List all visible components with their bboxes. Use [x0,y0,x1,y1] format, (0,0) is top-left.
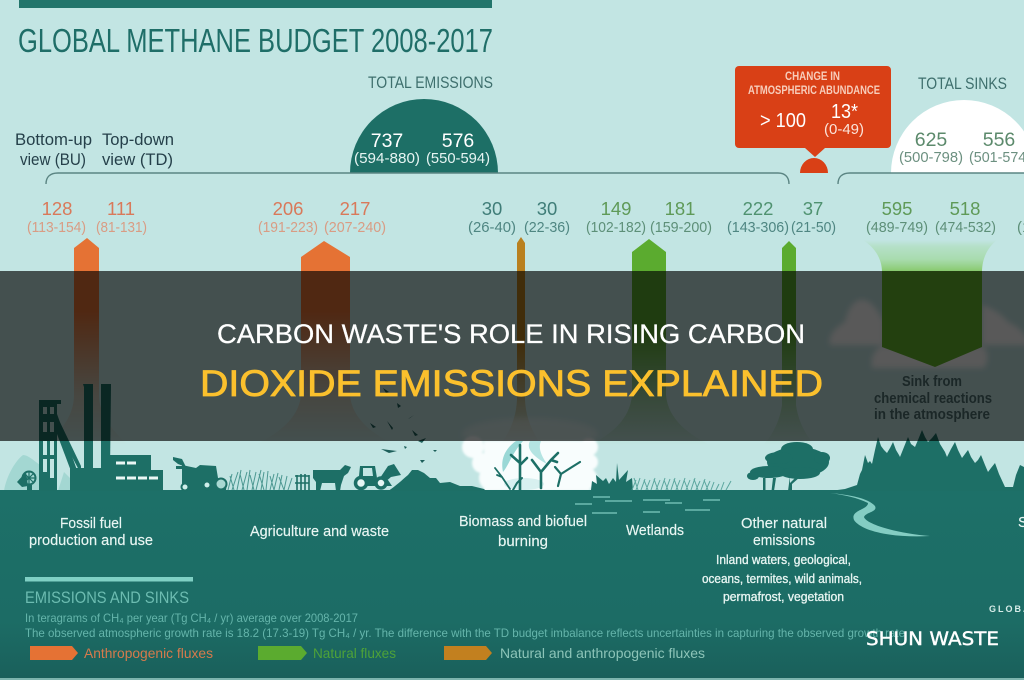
label: biomass and biofuel burning [459,514,587,550]
view labels: Top-down [102,131,174,149]
values: wetlands [586,198,712,236]
callout: change in atmospheric abundance: CHANGE IN [785,71,840,83]
legend heading: EMISSIONS AND SINKS [25,589,189,607]
legend: natural fluxes: Natural fluxes [313,645,396,661]
values: agriculture and waste: 217 [340,198,370,219]
dome: total emissions [350,99,498,173]
values: biomass burning: (26-40) [468,219,516,236]
values: wetlands: (102-182) [586,219,646,236]
dome: total sinks: (500-798) [899,149,963,166]
callout: change in atmospheric abundance: ATMOSPHERIC ABUNDANCE [748,85,880,97]
values: agriculture and waste [258,198,386,236]
label: other natural emissions: Other natural [741,516,827,532]
label: fossil fuel: Fossil fuel [60,516,122,532]
callout: change in atmospheric abundance: (0-49) [824,122,864,138]
icon: crop field [228,470,292,490]
icon: coal mine and factory [17,384,163,491]
hills behind the mine [4,455,78,491]
icon: tree [747,442,830,491]
label: agriculture and waste: Agriculture and waste [250,524,389,540]
values: other natural emissions: 37 [803,198,823,219]
bottom edge [0,678,1024,680]
title: GLOBAL METHANE BUDGET 2008-2017 [18,22,493,59]
arrow: other natural flux [763,241,815,445]
values: fossil fuel: 128 [42,198,72,219]
values: wetlands: (159-200) [650,219,712,236]
scene: smoke from burning [462,418,598,491]
legend: natural and anthropogenic fluxes: Natural and anthropogenic fluxes [500,645,705,661]
label: sink from chemical reactions: in the atmosphere [874,407,990,423]
dome: total emissions: (594-880) [354,150,420,167]
values: biomass burning [468,198,570,236]
legend description: The observed atmospheric growth rate is 18.2 (17.3-19) Tg CH₄ / yr. The difference with the TD budget imbalance reflects uncertainties in capturing the observed growth rate [25,626,905,640]
values: biomass burning: (22-36) [524,219,570,236]
dome: total emissions: (550-594) [426,150,490,167]
icon: waste mound [388,470,486,491]
label: biomass and biofuel burning: burning [498,534,548,550]
values: other natural emissions: (21-50) [791,219,836,236]
ground [0,490,1024,678]
icon: birds [370,388,437,463]
dome: total emissions: 576 [442,130,474,152]
label: other natural sources detail: Inland waters, geological, [716,553,851,567]
dome: total sinks [891,100,1024,173]
values: biomass burning: 30 [537,198,557,219]
legend rule [25,577,193,582]
dome: total sinks: 625 [915,129,947,151]
icon: combine harvester [173,457,227,490]
values: biomass burning: 30 [482,198,502,219]
callout: change in atmospheric abundance: > 100 [760,110,806,132]
label: other natural emissions: emissions [753,533,815,549]
values: fossil fuel [27,198,147,236]
label: fossil fuel [29,516,153,549]
values: fossil fuel: 111 [107,198,135,219]
callout: change in atmospheric abundance: 13* [831,101,858,123]
values: wetlands: 181 [665,198,695,219]
legend description: In teragrams of CH₄ per year (Tg CH₄ / yr) average over 2008-2017 [25,611,358,625]
brackets [46,173,1024,184]
values: chemical sink: (489-749) [866,219,928,236]
view labels: view (TD) [102,151,173,169]
icon: tractor [356,464,401,488]
values: other natural emissions: (143-306) [727,219,789,236]
icon: fence [295,474,309,491]
arrow: sink from chemical reactions [863,240,997,367]
label: fossil fuel: production and use [29,533,153,549]
arrow: biomass flux [500,237,542,445]
view labels [15,131,174,169]
overlay heading: DIOXIDE EMISSIONS EXPLAINED [200,363,823,404]
label: other natural sources detail [702,553,862,604]
dome: total sinks: 556 [983,129,1015,151]
arrow: fossil fuel flux [46,238,128,445]
icon: dead trees [495,445,580,490]
callout: change in atmospheric abundance [735,66,891,173]
label: other natural sources detail: oceans, termites, wild animals, [702,572,862,586]
icon: cow [313,465,351,491]
label: other natural emissions [741,516,827,549]
legend: natural fluxes [258,645,396,661]
values: chemical sink: 518 [950,198,980,219]
dome: total emissions: 737 [371,130,403,152]
values: fossil fuel: (81-131) [96,219,147,236]
icon: river [830,493,930,536]
watermark: SHUN WASTE [866,628,999,650]
values: chemical sink: (474-532) [935,219,996,236]
arrow: agriculture flux [255,241,395,445]
label: wetlands: Wetlands [626,523,684,539]
label: other natural sources detail: permafrost, vegetation [723,590,844,604]
label: sink from chemical reactions: chemical reactions [874,391,992,407]
overlay heading [200,319,823,404]
values: other natural emissions [727,198,836,236]
overlay band [0,271,1024,441]
legend: anthropogenic fluxes: Anthropogenic fluxes [84,645,213,661]
values: agriculture and waste: (191-223) [258,219,318,236]
values: fossil fuel: (113-154) [27,219,86,236]
icon: wetland reeds [575,463,731,513]
values: agriculture and waste: (207-240) [324,219,386,236]
label: biomass and biofuel burning: Biomass and biofuel [459,514,587,530]
values: chemical sink [866,198,1024,236]
legend: anthropogenic fluxes [30,645,213,661]
label: sink from chemical reactions: Sink from [902,374,962,390]
view labels: view (BU) [20,151,86,169]
heading: total sinks: TOTAL SINKS [918,75,1007,93]
values: wetlands: 149 [601,198,631,219]
values: agriculture and waste: 206 [273,198,303,219]
clouds around sink [830,300,1024,368]
legend description [25,611,905,640]
view labels: Bottom-up [15,131,92,149]
values: chemical sink: 595 [882,198,912,219]
top bar [19,0,492,8]
source labels [29,514,1024,604]
icon: forest [830,430,1024,491]
overlay heading: CARBON WASTE'S ROLE IN RISING CARBON [217,319,805,349]
label: sink from chemical reactions [874,374,992,423]
heading: total emissions: TOTAL EMISSIONS [368,74,493,92]
arrow: wetland flux [590,239,710,445]
values: other natural emissions: 222 [743,198,773,219]
